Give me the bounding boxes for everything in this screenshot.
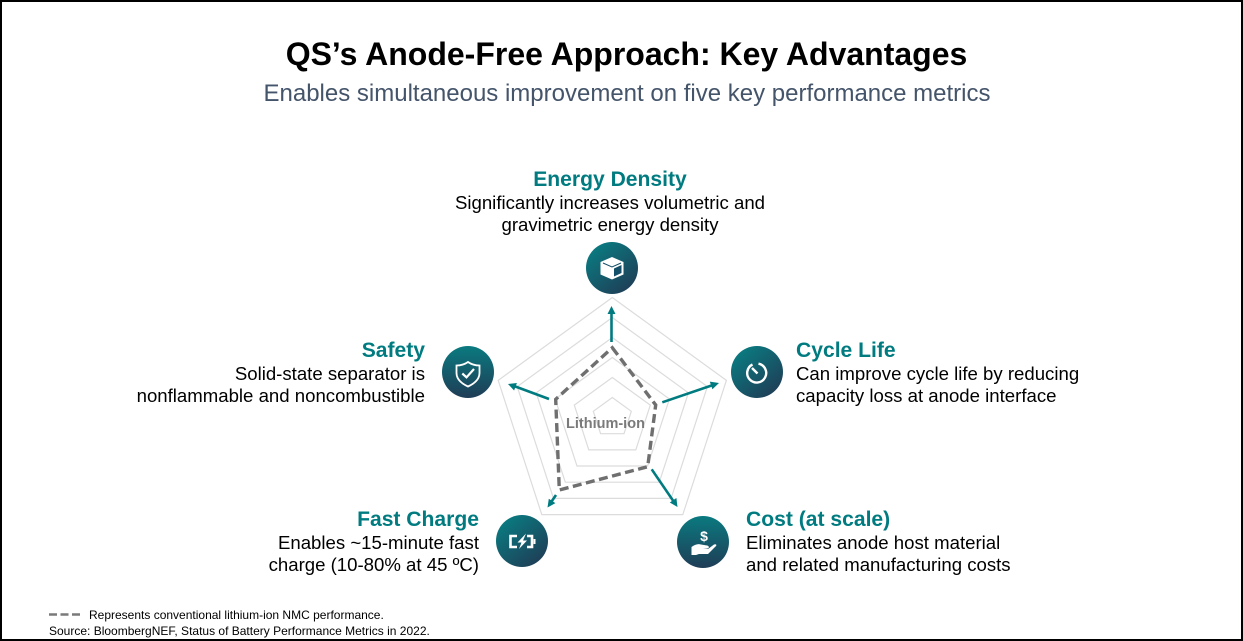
arrow: cost: [652, 469, 678, 507]
callout: cycle life: Cycle Life: [796, 339, 896, 362]
icon: safety shield: [442, 346, 494, 398]
legend: Represents conventional lithium-ion NMC performance.: [89, 608, 384, 622]
callout: safety: [137, 339, 425, 406]
title: QS’s Anode-Free Approach: Key Advantages: [286, 36, 967, 72]
icon: energy density cube: [586, 242, 638, 294]
arrow: safety: [508, 383, 549, 399]
source: Source: BloombergNEF, Status of Battery Performance Metrics in 2022.: [49, 624, 430, 638]
callout: fast charge: Fast Charge: [357, 508, 479, 531]
icon: cost hand with dollar: [677, 516, 729, 568]
chart label: lithium-ion: Lithium-ion: [566, 416, 645, 432]
callout: energy density: Energy Density: [533, 168, 687, 191]
callout: cycle life: Can improve cycle life by reducing: [796, 363, 1079, 384]
callout: safety: nonflammable and noncombustible: [137, 385, 425, 406]
arrow: energy density: [608, 306, 616, 342]
callout: fast charge: [269, 508, 479, 575]
callout: cycle life: [796, 339, 1079, 406]
callout: cost: Cost (at scale): [746, 508, 890, 531]
callout: energy density: [455, 168, 765, 235]
callout: cost: Eliminates anode host material: [746, 532, 1000, 553]
callout: fast charge: charge (10-80% at 45 ºC): [269, 554, 479, 575]
callout: safety: Solid-state separator is: [235, 363, 425, 384]
callout: energy density: gravimetric energy density: [501, 214, 718, 235]
callout: fast charge: Enables ~15-minute fast: [278, 532, 479, 553]
callout: cost: and related manufacturing costs: [746, 554, 1011, 575]
arrow: fast charge: [548, 495, 556, 508]
icon: cost hand with dollar: $: [700, 528, 708, 544]
callout: cycle life: capacity loss at anode interface: [796, 385, 1056, 406]
icon: cycle life timer: [731, 346, 783, 398]
radar grid: [498, 298, 726, 515]
callout: cost: [746, 508, 1011, 575]
icon: fast charge battery: [496, 515, 548, 567]
arrow: cycle life: [662, 382, 719, 402]
dashed lithium-ion polygon: [556, 348, 656, 490]
subtitle: Enables simultaneous improvement on five key performance metrics: [264, 80, 990, 107]
callout: energy density: Significantly increases volumetric and: [455, 192, 765, 213]
callout: safety: Safety: [362, 339, 425, 362]
arrows: [508, 306, 719, 508]
